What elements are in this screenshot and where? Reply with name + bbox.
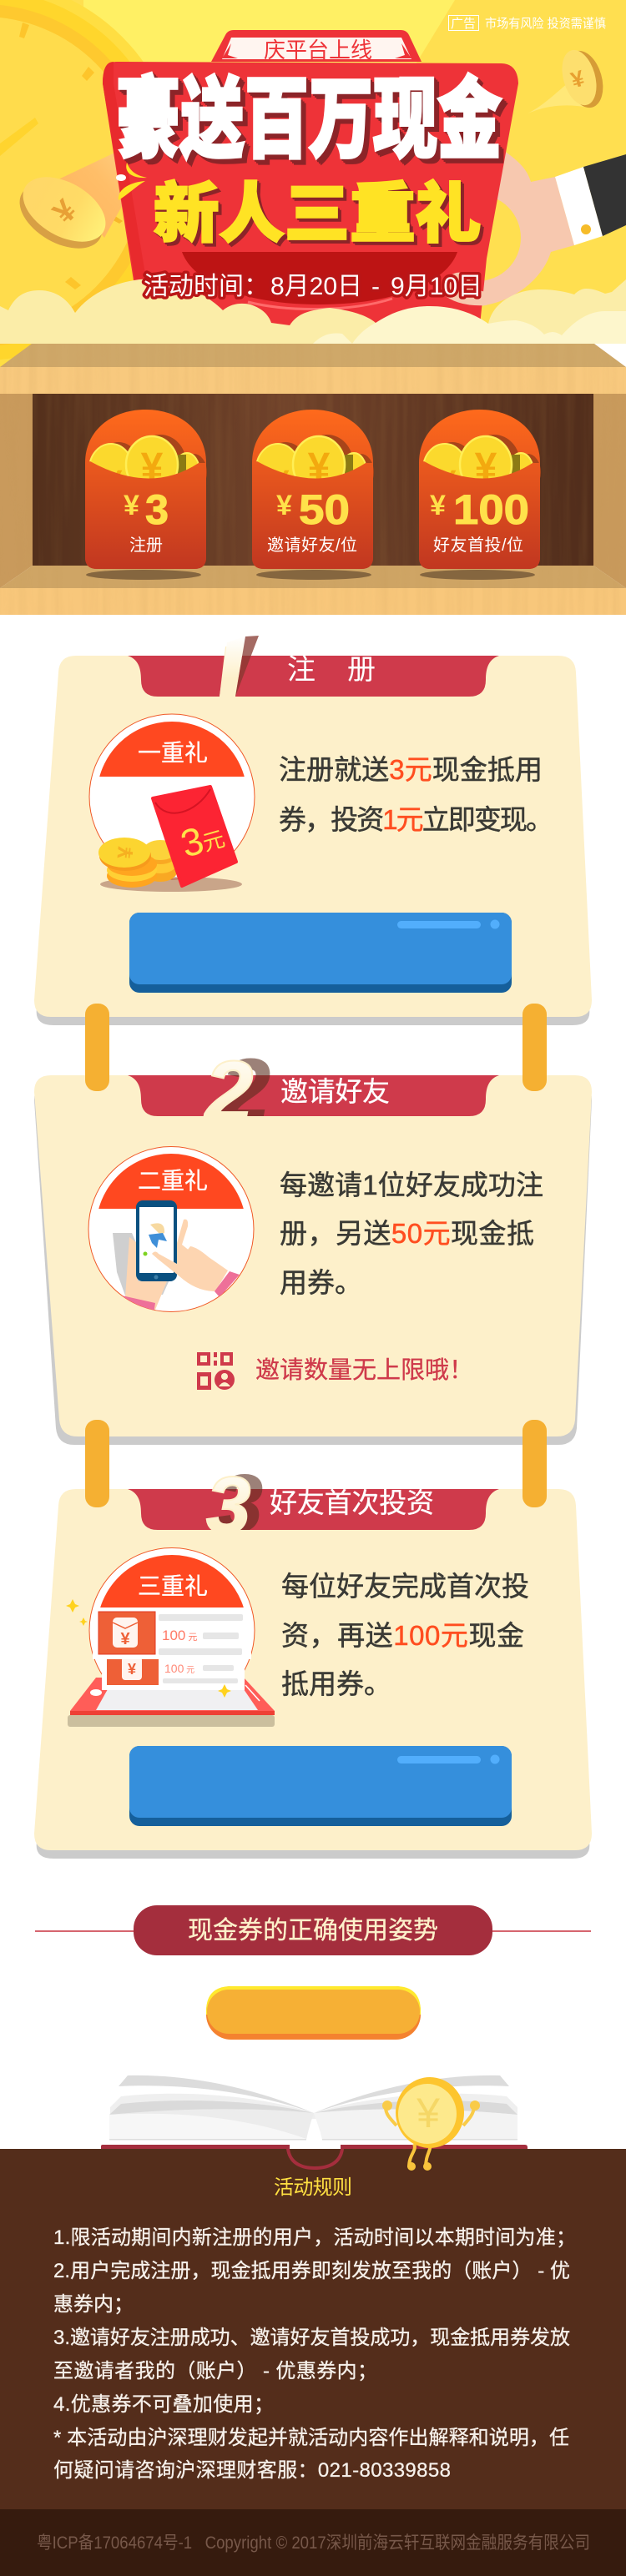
gold ring (0, 0, 179, 371)
date line: 活动时间 (144, 273, 244, 300)
icon: coins and red packet: 3 (176, 818, 209, 866)
gift medallion (88, 1146, 254, 1314)
description: 每邀请1位好友成功注 (280, 1170, 543, 1200)
description: 每位好友完成首次投 (281, 1571, 529, 1602)
gift medallion: 二重礼 (138, 1168, 208, 1194)
description (279, 754, 553, 835)
rules text: 何疑问请咨询沪深理财客服：021-80339858 (53, 2459, 451, 2482)
dark red swag (182, 252, 457, 309)
heading ribbon: 3 (206, 1461, 250, 1550)
gift medallion: 一重礼 (138, 740, 208, 766)
icon: right gold coin (524, 46, 609, 115)
panel: red envelope 50 yuan: ¥ (276, 490, 292, 521)
rules section background (0, 2149, 626, 2509)
tab: 庆平台上线: 庆平台上线 (264, 38, 372, 63)
icon: firework (116, 163, 147, 200)
rules text: 4.优惠券不可叠加使用； (53, 2393, 274, 2416)
heading ribbon: 邀请好友 (280, 1076, 390, 1107)
gift medallion (66, 1547, 275, 1727)
rules text: 3.邀请好友注册成功、邀请好友首投成功，现金抵用券发放 (53, 2327, 570, 2349)
tab: 庆平台上线 (211, 30, 422, 63)
section heading: how to use vouchers: 现金券的正确使用姿势 (188, 1917, 438, 1945)
rules text: * 本活动由沪深理财发起并就活动内容作出解释和说明，任 (53, 2427, 569, 2449)
description: 注册就送3元现金抵用 (279, 754, 543, 785)
rules text (53, 2226, 576, 2482)
rules text: 至邀请者我的（账户） - 优惠券内； (53, 2360, 377, 2382)
date line: 9月10日 (391, 273, 482, 300)
book cover (101, 2145, 528, 2170)
icon: sparkles (66, 1599, 231, 1698)
panel: red envelope 100 yuan: 100 (453, 486, 529, 533)
rules text: 2.用户完成注册，现金抵用券即刻发放至我的（账户） - 优 (53, 2260, 570, 2282)
description: 资，再送100元现金 (281, 1620, 524, 1651)
connector straps, second pair (85, 1420, 547, 1507)
panel: hero banner (0, 0, 626, 371)
panel: red envelope 3 yuan: ¥ (124, 490, 139, 521)
ad label (449, 15, 606, 31)
heading ribbon (128, 1474, 499, 1530)
icon: phone and hands (113, 1200, 240, 1314)
description: 券，投资1元立即变现。 (279, 804, 553, 835)
panel: gift two, invite friends (34, 1044, 592, 1445)
panel: wooden shelf (0, 344, 626, 615)
description: 册，另送50元现金抵 (280, 1218, 534, 1249)
panel: red envelope 3 yuan: 3 (145, 486, 169, 533)
icon: left gold coin: ¥ (47, 194, 83, 230)
ad label: 广告 (451, 17, 476, 31)
coin mascot (382, 2077, 480, 2171)
connector straps, first pair (85, 1004, 547, 1091)
panel: red envelope 3 yuan: 注册 (129, 536, 163, 555)
panel: gift three, first investment (34, 1461, 592, 1859)
date line: - (371, 273, 380, 300)
icon: coins and red packet: ¥ (112, 845, 139, 860)
date line: ： (244, 273, 269, 300)
gift medallion (89, 714, 255, 892)
description (280, 1170, 543, 1298)
icon: voucher tablet: ¥ (120, 1630, 130, 1648)
icon: voucher tablet (68, 1608, 275, 1727)
icon: coins and red packet (98, 787, 242, 892)
red title banner (103, 30, 518, 334)
rules text: 1.限活动期间内新注册的用户，活动时间以本期时间为准； (53, 2226, 576, 2249)
coin light beam (58, 148, 125, 238)
front clouds (313, 306, 626, 344)
title: 豪送百万现金: 豪送百万现金 (116, 70, 502, 169)
description (281, 1571, 529, 1699)
icon: voucher tablet: ¥ (128, 1661, 136, 1678)
icon: voucher tablet: 100 元 (164, 1662, 194, 1675)
panel: red envelope 100 yuan: 好友首投/位 (433, 536, 523, 555)
panel: red envelope 50 yuan (252, 410, 374, 580)
heading ribbon (128, 1058, 499, 1116)
rules heading: 活动规则 (274, 2176, 352, 2199)
hand with cuff (434, 148, 626, 306)
heading ribbon (128, 636, 499, 697)
date line: 8月20日 (270, 273, 362, 300)
button (129, 1746, 512, 1826)
icon: right gold coin: ¥ (568, 66, 587, 93)
thumb over banner (442, 273, 488, 305)
panel: red envelope 3 yuan (85, 410, 207, 580)
back clouds (0, 279, 626, 344)
icon: qr code (197, 1352, 235, 1390)
ad label: 市场有风险 投资需谨慎 (485, 16, 606, 31)
gift medallion: 三重礼 (138, 1573, 208, 1599)
orange button (206, 1986, 421, 2040)
panel: red envelope 100 yuan (419, 410, 541, 580)
note: 邀请数量无上限哦！ (255, 1356, 473, 1384)
rules text: 惠券内； (53, 2293, 134, 2316)
panel: red envelope 100 yuan: ¥ (430, 490, 446, 521)
open book (101, 2075, 528, 2170)
description: 用券。 (280, 1267, 362, 1298)
panel: red envelope 50 yuan: 50 (299, 486, 350, 533)
section heading: how to use vouchers (35, 1905, 591, 1955)
panel: gift one, register (34, 636, 592, 1025)
description: 抵用券。 (281, 1668, 391, 1699)
title: 新人三重礼: 新人三重礼 (154, 177, 481, 250)
footer background (0, 2509, 626, 2576)
panel: red envelope 50 yuan: 邀请好友/位 (267, 536, 357, 555)
coin mascot: ¥ (416, 2090, 440, 2136)
button (129, 913, 512, 993)
heading ribbon: 2 (203, 1044, 253, 1141)
icon: left gold coin (8, 164, 117, 262)
heading ribbon: 注 册 (287, 654, 376, 686)
icon: voucher tablet: 100 元 (162, 1628, 197, 1643)
icon: coins and red packet: 元 (199, 826, 228, 856)
heading ribbon: 好友首次投资 (270, 1487, 434, 1518)
